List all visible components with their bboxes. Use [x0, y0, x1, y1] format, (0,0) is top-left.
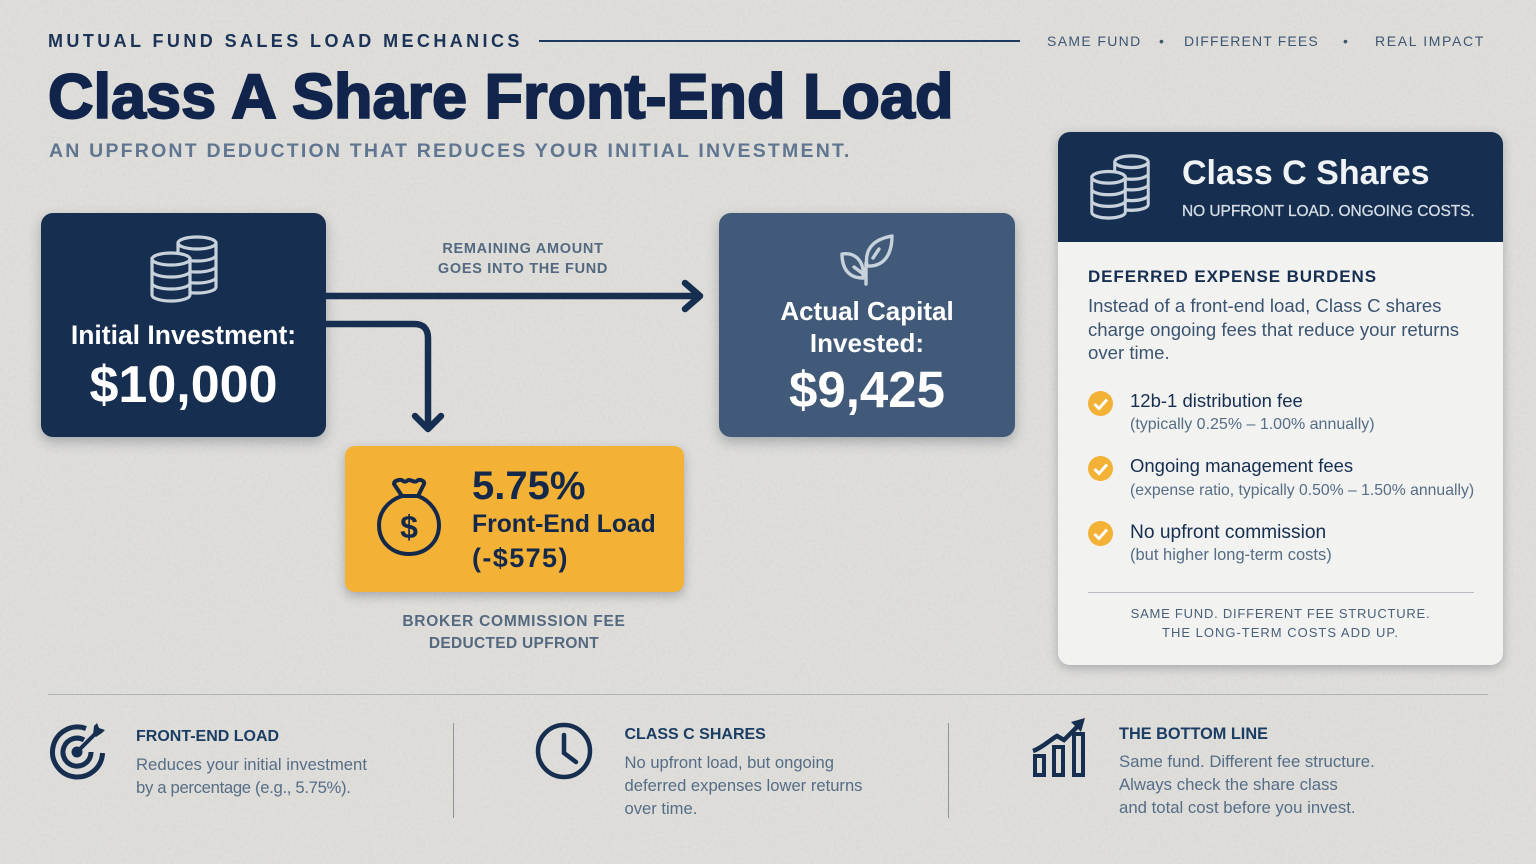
- header tags: •: [1343, 33, 1348, 49]
- footer text: [1119, 752, 1375, 817]
- icon: money bag: $: [400, 509, 418, 545]
- load caption: DEDUCTED UPFRONT: [429, 634, 599, 652]
- arrow label: [438, 241, 608, 277]
- icon: sprout: [840, 234, 894, 286]
- check item 3: (but higher long-term costs): [1130, 546, 1332, 564]
- header rule: [539, 40, 1020, 42]
- title: Class A Share Front-End Load: [48, 62, 953, 132]
- arrow: deducted load: [326, 320, 444, 432]
- panel: class C shares: [1058, 132, 1503, 665]
- subtitle: AN UPFRONT DEDUCTION THAT REDUCES YOUR INITIAL INVESTMENT.: [49, 140, 852, 162]
- header title: Class C Shares: [1182, 154, 1430, 192]
- label: [780, 296, 954, 358]
- footer text: Reduces your initial investment: [136, 755, 367, 774]
- header tags: REAL IMPACT: [1375, 33, 1485, 49]
- footer text: [136, 755, 367, 797]
- footer text: [624, 753, 862, 818]
- load label: [472, 511, 656, 573]
- footer text: over time.: [624, 799, 697, 818]
- footer divider: [452, 723, 454, 818]
- amount: $10,000: [90, 356, 277, 414]
- icon: clock: [536, 722, 592, 780]
- footer rule: [48, 694, 1488, 695]
- panel footnote: THE LONG-TERM COSTS ADD UP.: [1162, 625, 1399, 640]
- load label: (-$575): [472, 543, 569, 573]
- header tags: •: [1159, 33, 1164, 49]
- footer text: by a percentage (e.g., 5.75%).: [136, 778, 351, 797]
- icon: growth chart: [1032, 718, 1085, 777]
- icon: check: [1088, 521, 1113, 546]
- footer text: deferred expenses lower returns: [624, 776, 862, 795]
- icon: money bag: [377, 478, 441, 556]
- footer heading: FRONT-END LOAD: [136, 728, 279, 745]
- check item 1: (typically 0.25% – 1.00% annually): [1130, 416, 1375, 433]
- icon: check: [1088, 391, 1113, 416]
- header tags: [1047, 33, 1485, 49]
- divider: [1088, 592, 1474, 593]
- kicker heading: MUTUAL FUND SALES LOAD MECHANICS: [48, 31, 523, 51]
- description: [1088, 295, 1459, 363]
- label: Invested:: [810, 328, 924, 358]
- panel: front-end load: [345, 446, 684, 592]
- footer heading: THE BOTTOM LINE: [1119, 725, 1268, 743]
- arrow label: REMAINING AMOUNT: [442, 241, 604, 257]
- footer text: and total cost before you invest.: [1119, 798, 1356, 817]
- check item 1: [1088, 390, 1375, 433]
- load label: Front-End Load: [472, 511, 656, 538]
- amount: $9,425: [789, 361, 945, 418]
- check item 2: Ongoing management fees: [1130, 455, 1353, 476]
- header tags: SAME FUND: [1047, 33, 1142, 49]
- panel: initial investment: [41, 213, 326, 437]
- footer: front-end load: [50, 723, 367, 797]
- panel header: [1058, 132, 1503, 242]
- load caption: BROKER COMMISSION FEE: [402, 613, 626, 630]
- arrow label: GOES INTO THE FUND: [438, 261, 608, 277]
- description: over time.: [1088, 342, 1170, 363]
- icon: check: [1088, 456, 1113, 481]
- section heading: DEFERRED EXPENSE BURDENS: [1088, 267, 1377, 286]
- footer text: Always check the share class: [1119, 775, 1338, 794]
- icon: target: [50, 723, 105, 780]
- label: Initial Investment:: [71, 320, 296, 350]
- label: Actual Capital: [780, 296, 954, 326]
- footer: bottom line: [1032, 718, 1375, 817]
- footer text: Same fund. Different fee structure.: [1119, 752, 1375, 771]
- panel footnote: SAME FUND. DIFFERENT FEE STRUCTURE.: [1131, 606, 1430, 621]
- footer divider: [948, 723, 949, 818]
- header subtitle: NO UPFRONT LOAD. ONGOING COSTS.: [1182, 203, 1475, 220]
- icon: coins: [1090, 154, 1150, 220]
- check item 3: [1088, 521, 1332, 564]
- description: Instead of a front-end load, Class C shares: [1088, 295, 1441, 316]
- footer text: No upfront load, but ongoing: [624, 753, 834, 772]
- check item 1: 12b-1 distribution fee: [1130, 390, 1303, 411]
- check item 3: No upfront commission: [1130, 522, 1326, 543]
- panel footnote: [1131, 606, 1430, 640]
- footer: class C: [536, 722, 862, 818]
- header tags: DIFFERENT FEES: [1184, 33, 1319, 49]
- check item 2: [1088, 455, 1474, 499]
- load caption: [402, 613, 626, 652]
- description: charge ongoing fees that reduce your returns: [1088, 318, 1459, 340]
- footer heading: CLASS C SHARES: [624, 726, 766, 743]
- arrow: remaining amount: [326, 280, 704, 312]
- panel: actual capital: [719, 213, 1015, 437]
- percentage: 5.75%: [472, 464, 585, 508]
- check item 2: (expense ratio, typically 0.50% – 1.50% annually): [1130, 482, 1474, 499]
- icon: coins: [150, 235, 218, 303]
